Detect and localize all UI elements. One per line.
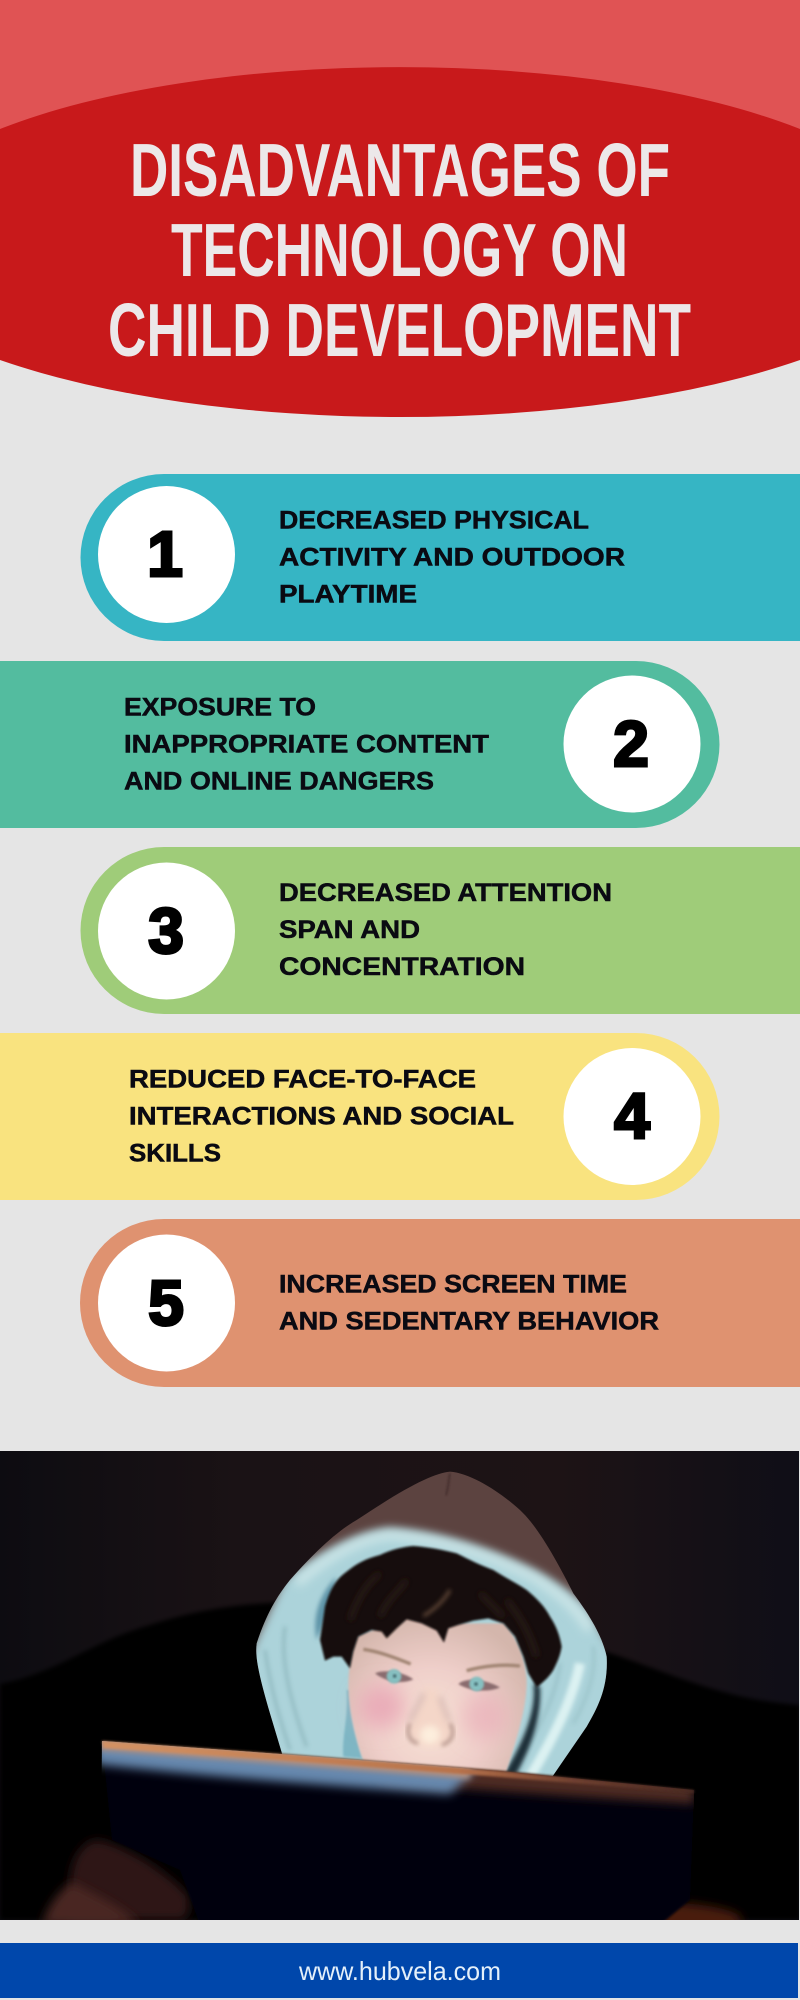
panel: item 4 <box>0 1033 720 1200</box>
inner hood shadow right <box>503 1683 540 1777</box>
number badge 4 <box>564 1048 700 1185</box>
hood fold <box>446 1473 450 1495</box>
panel: item 5 <box>80 1219 800 1387</box>
number badge 5: 5 <box>148 1267 184 1339</box>
pill 3 <box>81 847 800 1014</box>
tablet <box>95 1730 694 1925</box>
inner hood shadow left <box>315 1577 337 1640</box>
inner lining left <box>343 1690 363 1758</box>
text 3 <box>279 879 612 981</box>
website url: www.hubvela.com <box>298 1956 501 1986</box>
shoulders silhouette <box>0 1602 800 1920</box>
footer band <box>0 1943 798 1998</box>
number badge 3: 3 <box>148 895 184 967</box>
hood and face, drawn in 3x coordinates <box>256 1472 607 1776</box>
tablet body <box>102 1741 694 1925</box>
text 4: REDUCED FACE-TO-FACE <box>129 1066 476 1094</box>
text 1: ACTIVITY AND OUTDOOR <box>279 544 625 572</box>
header top band <box>0 0 800 240</box>
text 3: CONCENTRATION <box>279 953 525 981</box>
text 5 <box>279 1270 659 1336</box>
eyes <box>375 1669 500 1691</box>
panel: item 2 <box>0 661 720 828</box>
text 1: PLAYTIME <box>279 580 417 608</box>
number badge 3 <box>98 862 235 1000</box>
text 3: SPAN AND <box>279 916 420 944</box>
pill 1 <box>81 474 800 641</box>
header banner <box>0 0 800 417</box>
text 4: SKILLS <box>129 1140 221 1168</box>
title <box>108 128 691 372</box>
pill 2 <box>0 661 720 828</box>
number badge 1: 1 <box>147 518 183 590</box>
text 5: INCREASED SCREEN TIME <box>279 1270 627 1298</box>
panel: item 3 <box>81 847 800 1014</box>
eyebrows <box>363 1649 520 1671</box>
number badge 4: 4 <box>614 1080 650 1152</box>
hood lit lining <box>247 1528 620 1793</box>
number badge 2 <box>564 676 700 812</box>
number badge 5 <box>98 1234 235 1372</box>
text 2: EXPOSURE TO <box>124 694 316 722</box>
text 4 <box>129 1066 514 1168</box>
text 5: AND SEDENTARY BEHAVIOR <box>279 1308 659 1336</box>
pill 4 <box>0 1033 720 1200</box>
text 1: DECREASED PHYSICAL <box>279 506 589 534</box>
number badge 1 <box>98 486 235 623</box>
text 2: AND ONLINE DANGERS <box>124 768 434 796</box>
header red ellipse <box>0 67 800 417</box>
nose <box>408 1687 453 1747</box>
text 3: DECREASED ATTENTION <box>279 879 612 907</box>
panel: item 1 <box>81 474 800 641</box>
text 4: INTERACTIONS AND SOCIAL <box>129 1102 514 1130</box>
text 2: INAPPROPRIATE CONTENT <box>124 730 489 758</box>
tablet glow, clipped to the tablet face <box>95 1730 694 1804</box>
tablet orange edge <box>102 1741 694 1793</box>
pill 5 <box>80 1219 800 1387</box>
text 1 <box>279 506 625 608</box>
photo: hooded child lit by a tablet <box>0 1451 799 1920</box>
cheeks <box>358 1685 508 1740</box>
hands <box>42 1840 742 1938</box>
face <box>348 1617 527 1780</box>
hair <box>320 1546 562 1687</box>
text 2 <box>124 694 489 796</box>
hood outer <box>256 1472 607 1780</box>
number badge 2: 2 <box>613 708 649 780</box>
